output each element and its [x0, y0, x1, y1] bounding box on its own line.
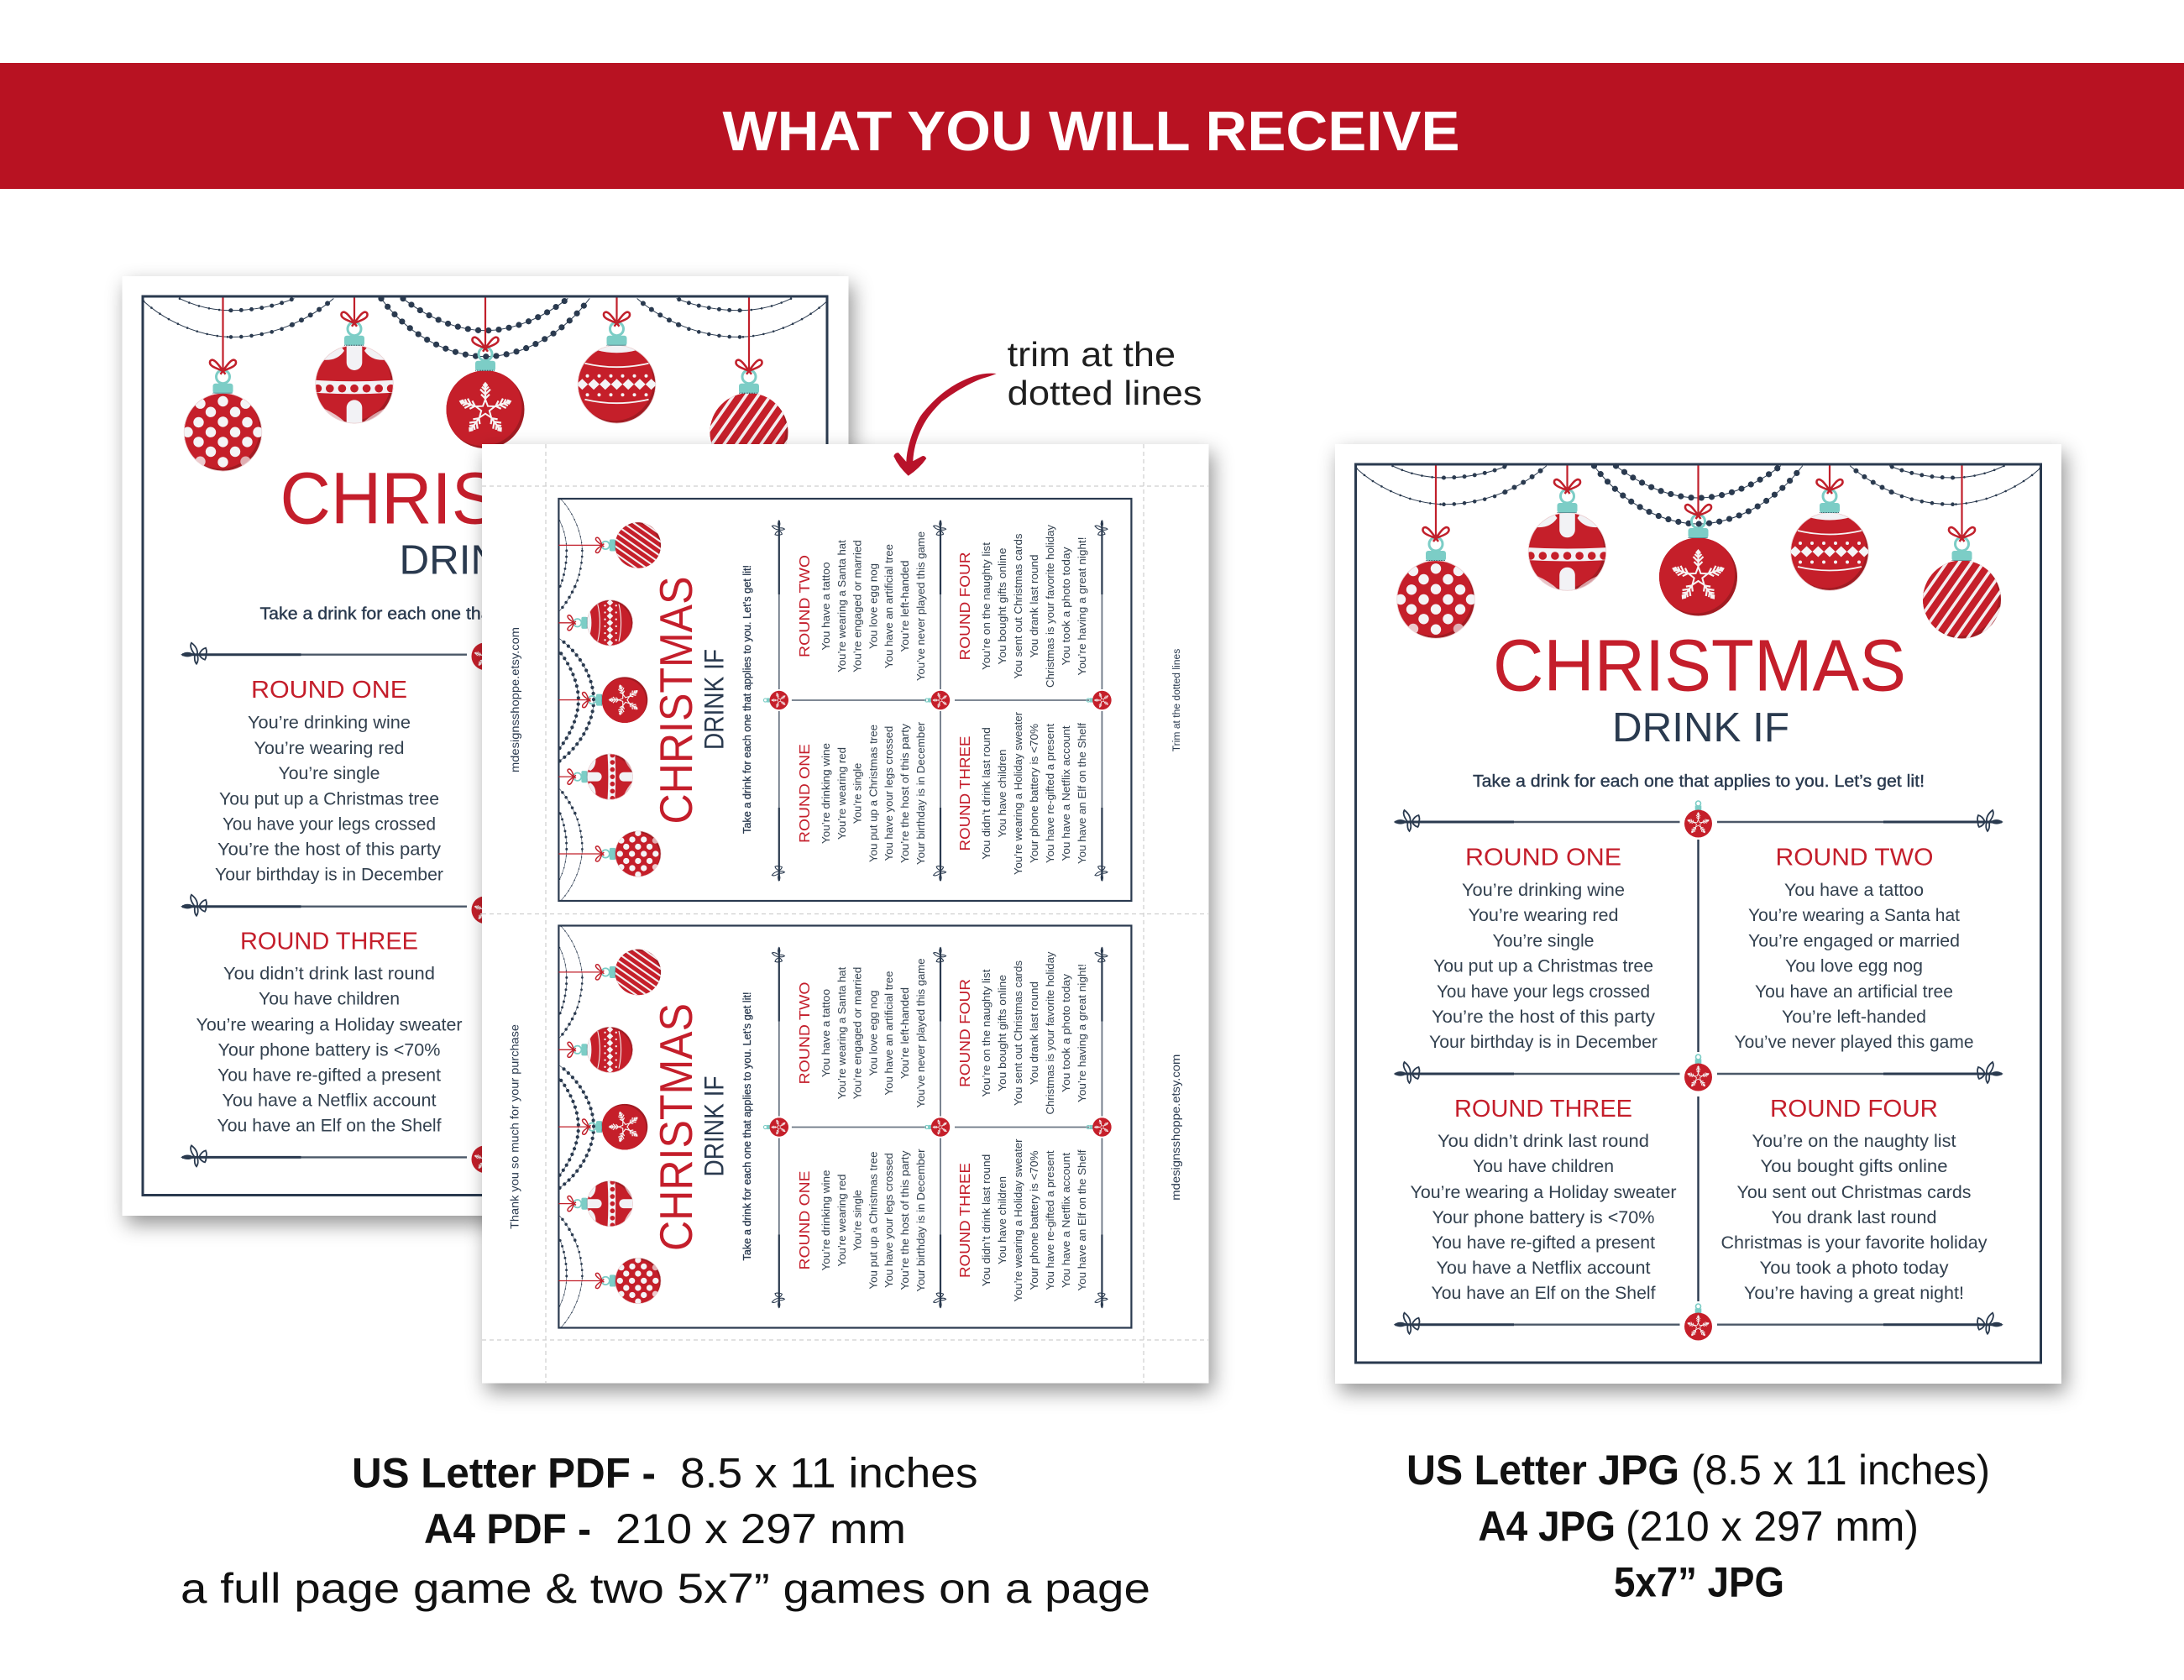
ornaments — [558, 500, 675, 900]
card: upper 5x7 game — [558, 499, 1131, 901]
round three: You have a Netflix account — [1060, 1153, 1072, 1288]
caption: PDF formats: A4 PDF - — [424, 1505, 591, 1552]
dividers — [763, 947, 1112, 1308]
round three: You have re-gifted a present — [1044, 724, 1056, 863]
round four: You sent out Christmas cards — [1012, 960, 1024, 1106]
round three: You have children — [996, 1176, 1008, 1264]
title: CHRISTMAS — [651, 576, 702, 824]
round three: You have children — [996, 749, 1008, 838]
round three: Your phone battery is <70% — [1028, 1150, 1040, 1290]
round two: You love egg nog — [867, 563, 879, 649]
round three: You have an Elf on the Shelf — [1076, 723, 1088, 864]
round three: You didn’t drink last round — [980, 1154, 992, 1286]
round four: You bought gifts online — [1760, 1157, 1948, 1176]
annotation: trim at the dotted lines — [1008, 335, 1202, 412]
round three: You have re-gifted a present — [217, 1066, 441, 1086]
round three: You have a Netflix account — [1436, 1259, 1651, 1278]
caption: JPG formats: (8.5 x 11 inches) — [1691, 1447, 1990, 1494]
round four: You drank last round — [1028, 554, 1040, 658]
round three: You’re wearing a Holiday sweater — [1012, 711, 1024, 875]
paper — [1335, 444, 2061, 1384]
round one: Your birthday is in December — [1429, 1033, 1658, 1052]
ornaments — [558, 926, 675, 1327]
instructions: Take a drink for each one that applies to you. Let’s get lit! — [260, 605, 712, 624]
round two: You have an artificial tree — [1755, 982, 1953, 1002]
caption: JPG formats: US Letter JPG — [1406, 1447, 1679, 1494]
margin text: shop address lower: mdesignsshoppe.etsy.com — [1169, 1055, 1182, 1201]
sheet title: CHRISTMAS — [1493, 625, 1906, 707]
panel: left full-page game sheet — [123, 276, 848, 1216]
round two: You’re engaged or married — [851, 540, 864, 673]
round one: You’re wearing red — [1468, 906, 1619, 925]
round four: You drank last round — [1028, 981, 1040, 1085]
round one: Your birthday is in December — [914, 1149, 927, 1291]
round three — [956, 711, 1088, 875]
round four: You took a photo today — [1760, 1259, 1949, 1278]
caption: JPG formats — [1406, 1447, 1990, 1606]
round four: You’re having a great night! — [1076, 964, 1088, 1102]
frame — [143, 296, 827, 1196]
round three: Your phone battery is <70% — [1432, 1208, 1654, 1227]
round four — [956, 951, 1088, 1115]
sheet title: CHRISTMAS — [280, 458, 694, 539]
frame — [558, 499, 1131, 901]
round two: You’re wearing a Santa hat — [835, 966, 848, 1099]
round three — [196, 929, 462, 1136]
round four: You sent out Christmas cards — [1736, 1183, 1972, 1202]
round three: You have children — [1473, 1157, 1614, 1176]
margin text: thank you: Thank you so much for your purchase — [507, 1024, 521, 1229]
annotation: trim at the dotted lines: trim at the — [1008, 335, 1176, 374]
round two: You’re engaged or married — [851, 967, 864, 1099]
round two: You’re left-handed — [1782, 1007, 1926, 1027]
subtitle: DRINK IF — [699, 649, 729, 750]
annotation: trim at the dotted lines: dotted lines — [1008, 374, 1202, 412]
round two: You have a tattoo — [820, 563, 832, 650]
round one: You’re wearing red — [835, 1174, 848, 1266]
round one: You put up a Christmas tree — [867, 725, 879, 862]
round four: You’re on the naughty list — [1752, 1132, 1956, 1151]
round one: You put up a Christmas tree — [219, 789, 439, 809]
round one: You have your legs crossed — [223, 814, 436, 835]
round two: You’ve never played this game — [914, 531, 927, 681]
caption: PDF formats: 8.5 x 11 inches — [680, 1450, 977, 1497]
frame — [1355, 464, 2040, 1363]
paper — [482, 444, 1209, 1384]
round three: ROUND THREE — [956, 735, 973, 851]
round one: ROUND ONE — [1465, 845, 1621, 871]
round four — [956, 525, 1088, 688]
round one: You’re the host of this party — [898, 1150, 911, 1290]
round three: Your phone battery is <70% — [218, 1041, 440, 1060]
round three: You have a Netflix account — [1060, 725, 1072, 861]
round two: You have a tattoo — [820, 989, 832, 1077]
round two — [796, 531, 927, 681]
round three: ROUND THREE — [240, 929, 418, 955]
round two: You love egg nog — [867, 991, 879, 1076]
round four: You bought gifts online — [996, 547, 1008, 665]
round one: You put up a Christmas tree — [867, 1152, 879, 1290]
round two: You’re left-handed — [898, 987, 911, 1079]
round one: You’re drinking wine — [248, 714, 411, 733]
round three: You’re wearing a Holiday sweater — [1012, 1138, 1024, 1301]
margin text: trim note: Trim at the dotted lines — [1172, 648, 1182, 751]
round four — [1721, 1096, 1988, 1303]
round one: ROUND ONE — [796, 744, 813, 843]
heading: WHAT YOU WILL RECEIVE — [722, 100, 1459, 163]
round three: You didn’t drink last round — [223, 965, 435, 984]
round two: You’re wearing a Santa hat — [1748, 906, 1960, 925]
round one — [796, 1149, 927, 1291]
round two: You have an artificial tree — [883, 544, 895, 668]
round two: ROUND TWO — [1775, 845, 1933, 871]
caption: JPG formats: (210 x 297 mm) — [1626, 1503, 1919, 1550]
round three: You have re-gifted a present — [1044, 1150, 1056, 1290]
round two — [1735, 845, 1973, 1052]
instructions: Take a drink for each one that applies to you. Let’s get lit! — [741, 992, 753, 1261]
round one: ROUND ONE — [796, 1170, 813, 1269]
sheet subtitle: DRINK IF — [1612, 705, 1789, 751]
panel: right full-page game sheet — [1335, 444, 2061, 1384]
dividers — [1396, 801, 2002, 1340]
round one: You put up a Christmas tree — [1433, 957, 1653, 976]
round four: You’re on the naughty list — [980, 542, 992, 670]
round four: ROUND FOUR — [956, 552, 973, 660]
round four: Christmas is your favorite holiday — [1044, 525, 1056, 688]
ornaments and garland — [144, 297, 827, 495]
round four: You drank last round — [1772, 1208, 1936, 1227]
round three: You have an Elf on the Shelf — [1431, 1284, 1656, 1303]
round two: You’re engaged or married — [1748, 931, 1960, 950]
round four: You took a photo today — [1060, 973, 1072, 1092]
round three: You’re wearing a Holiday sweater — [196, 1016, 462, 1035]
round one: You’re single — [851, 1190, 864, 1251]
caption: PDF formats: 210 x 297 mm — [615, 1505, 906, 1552]
round three: ROUND THREE — [956, 1163, 973, 1278]
arrow: points to trim line — [893, 374, 997, 476]
round two: You’ve never played this game — [1735, 1033, 1973, 1052]
frame — [558, 925, 1131, 1328]
dividers — [763, 521, 1112, 881]
round one: You’re single — [1493, 931, 1594, 950]
round one: You’re drinking wine — [820, 1170, 832, 1271]
round three: ROUND THREE — [1454, 1096, 1632, 1123]
round one: You have your legs crossed — [1437, 982, 1650, 1002]
round four: You sent out Christmas cards — [1012, 533, 1024, 678]
round four: Christmas is your favorite holiday — [1044, 951, 1056, 1115]
panel: middle sheet with two 5x7 games — [482, 444, 1209, 1384]
round four: You’re having a great night! — [1744, 1284, 1964, 1303]
paper — [123, 276, 848, 1216]
round one: You’re the host of this party — [898, 723, 911, 863]
round four: You bought gifts online — [996, 975, 1008, 1091]
card: lower 5x7 game — [558, 925, 1131, 1328]
round three: Your phone battery is <70% — [1028, 724, 1040, 863]
round one: Your birthday is in December — [215, 866, 443, 885]
round two: You have a tattoo — [1784, 881, 1924, 900]
trim lines — [482, 444, 1208, 1383]
round one: You’re wearing red — [254, 739, 405, 758]
round three: You have re-gifted a present — [1432, 1233, 1655, 1253]
round two — [796, 959, 927, 1108]
round two: You love egg nog — [1785, 957, 1923, 976]
round three — [1411, 1096, 1676, 1303]
round one: You have your legs crossed — [883, 726, 895, 861]
round four: ROUND FOUR — [956, 979, 973, 1087]
round two: You’re wearing a Santa hat — [835, 540, 848, 673]
caption: JPG formats: 5x7” JPG — [1614, 1559, 1784, 1606]
round one: You’re single — [279, 764, 380, 783]
instructions: Take a drink for each one that applies to you. Let’s get lit! — [741, 565, 753, 834]
caption: PDF formats: a full page game & two 5x7” games on a page — [181, 1565, 1150, 1612]
round four: You’re on the naughty list — [980, 969, 992, 1096]
ornaments and garland — [1357, 464, 2040, 662]
round one — [1429, 845, 1658, 1052]
round one: You have your legs crossed — [883, 1153, 895, 1288]
round four: You’re having a great night! — [1076, 537, 1088, 675]
round one: You’re wearing red — [835, 747, 848, 840]
round two: You’ve never played this game — [914, 959, 927, 1108]
round three: You didn’t drink last round — [1438, 1132, 1649, 1151]
subtitle: DRINK IF — [699, 1076, 729, 1177]
round three: You’re wearing a Holiday sweater — [1411, 1183, 1676, 1202]
round one: You’re drinking wine — [820, 743, 832, 844]
round one: Your birthday is in December — [914, 721, 927, 865]
title: CHRISTMAS — [651, 1003, 702, 1251]
caption: PDF formats — [181, 1450, 1150, 1612]
round three: You have a Netflix account — [222, 1091, 437, 1111]
sheet subtitle: DRINK IF — [400, 538, 576, 584]
round one — [215, 677, 443, 885]
dividers — [182, 634, 789, 1173]
round two: You have an artificial tree — [883, 971, 895, 1095]
instructions: Take a drink for each one that applies to you. Let’s get lit! — [1473, 772, 1925, 791]
round three: You didn’t drink last round — [980, 727, 992, 860]
round one: You’re the host of this party — [217, 840, 442, 860]
round one: You’re drinking wine — [1462, 881, 1625, 900]
round one: You’re single — [851, 763, 864, 824]
round three: You have an Elf on the Shelf — [217, 1117, 442, 1136]
round one: You’re the host of this party — [1432, 1007, 1656, 1027]
round three: You have children — [259, 990, 400, 1009]
round one: ROUND ONE — [251, 677, 407, 704]
caption: JPG formats: A4 JPG — [1478, 1503, 1616, 1550]
round four: You took a photo today — [1060, 547, 1072, 665]
header band — [0, 63, 2184, 189]
margin text: shop address: mdesignsshoppe.etsy.com — [508, 627, 521, 772]
round two: You’re left-handed — [898, 561, 911, 652]
caption: PDF formats: US Letter PDF - — [352, 1450, 656, 1497]
round four: ROUND FOUR — [1770, 1096, 1938, 1123]
round four: Christmas is your favorite holiday — [1721, 1233, 1988, 1253]
round three — [956, 1138, 1088, 1301]
round three: You have an Elf on the Shelf — [1076, 1149, 1088, 1291]
round two: ROUND TWO — [796, 555, 813, 657]
round two: ROUND TWO — [796, 982, 813, 1085]
round one — [796, 721, 927, 865]
